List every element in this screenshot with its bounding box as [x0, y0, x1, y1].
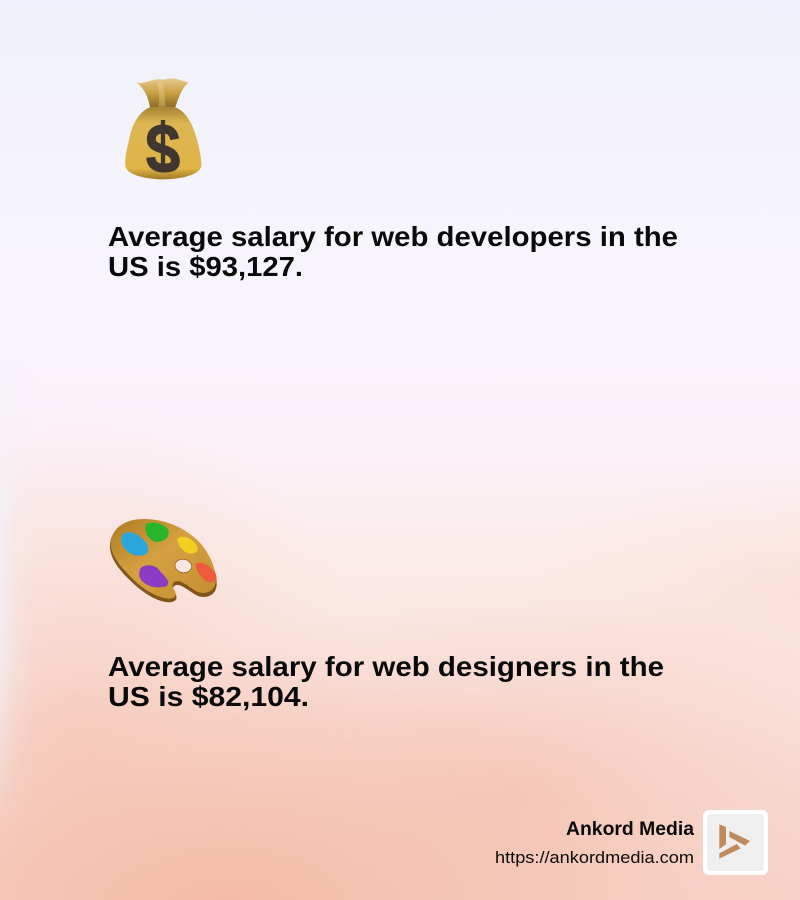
paint: green	[145, 523, 169, 542]
icon: money bag	[125, 78, 201, 179]
text: developer salary: Average salary for web developers in the	[108, 221, 678, 252]
logo	[703, 810, 768, 875]
paint: red	[196, 563, 216, 582]
icon glyph: dollar sign	[151, 120, 175, 172]
text: developer salary: US is $93,127.	[108, 251, 303, 282]
text: designer salary	[108, 651, 664, 712]
brand url: https://ankordmedia.com	[495, 848, 694, 867]
hole	[174, 558, 193, 574]
paint: blue	[121, 532, 148, 556]
paint: yellow	[177, 537, 198, 554]
text: developer salary	[108, 221, 678, 282]
icon: artist palette	[110, 519, 217, 602]
text: designer salary: Average salary for web designers in the	[108, 651, 664, 682]
text: designer salary: US is $82,104.	[108, 681, 309, 712]
paint: purple	[139, 565, 168, 587]
brand name: Ankord Media	[566, 819, 694, 840]
